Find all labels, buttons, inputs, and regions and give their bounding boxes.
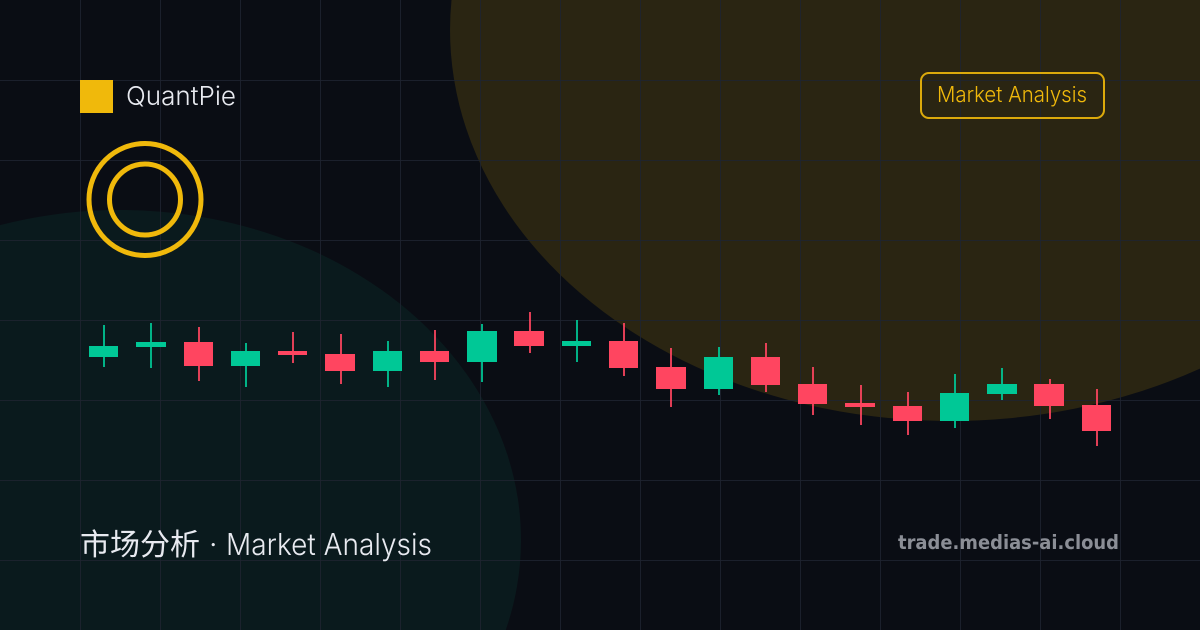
site url: trade.medias-ai.cloud bbox=[898, 531, 1119, 554]
candlestick chart bbox=[89, 312, 1111, 446]
bullish candles bbox=[89, 320, 1017, 428]
title: Market Analysis bbox=[226, 527, 432, 563]
background shape: teal ellipse bbox=[0, 210, 521, 630]
logo mark bbox=[80, 80, 113, 113]
icon: concentric rings bbox=[89, 144, 201, 256]
badge: Market Analysis bbox=[921, 73, 1104, 118]
title: · bbox=[209, 527, 217, 563]
brand name: QuantPie bbox=[126, 81, 236, 112]
badge: Market Analysis: Market Analysis bbox=[937, 82, 1087, 108]
bearish candles bbox=[184, 312, 1111, 446]
title: 市场分析 bbox=[80, 527, 200, 563]
background shape: yellow ellipse bbox=[450, 0, 1200, 421]
